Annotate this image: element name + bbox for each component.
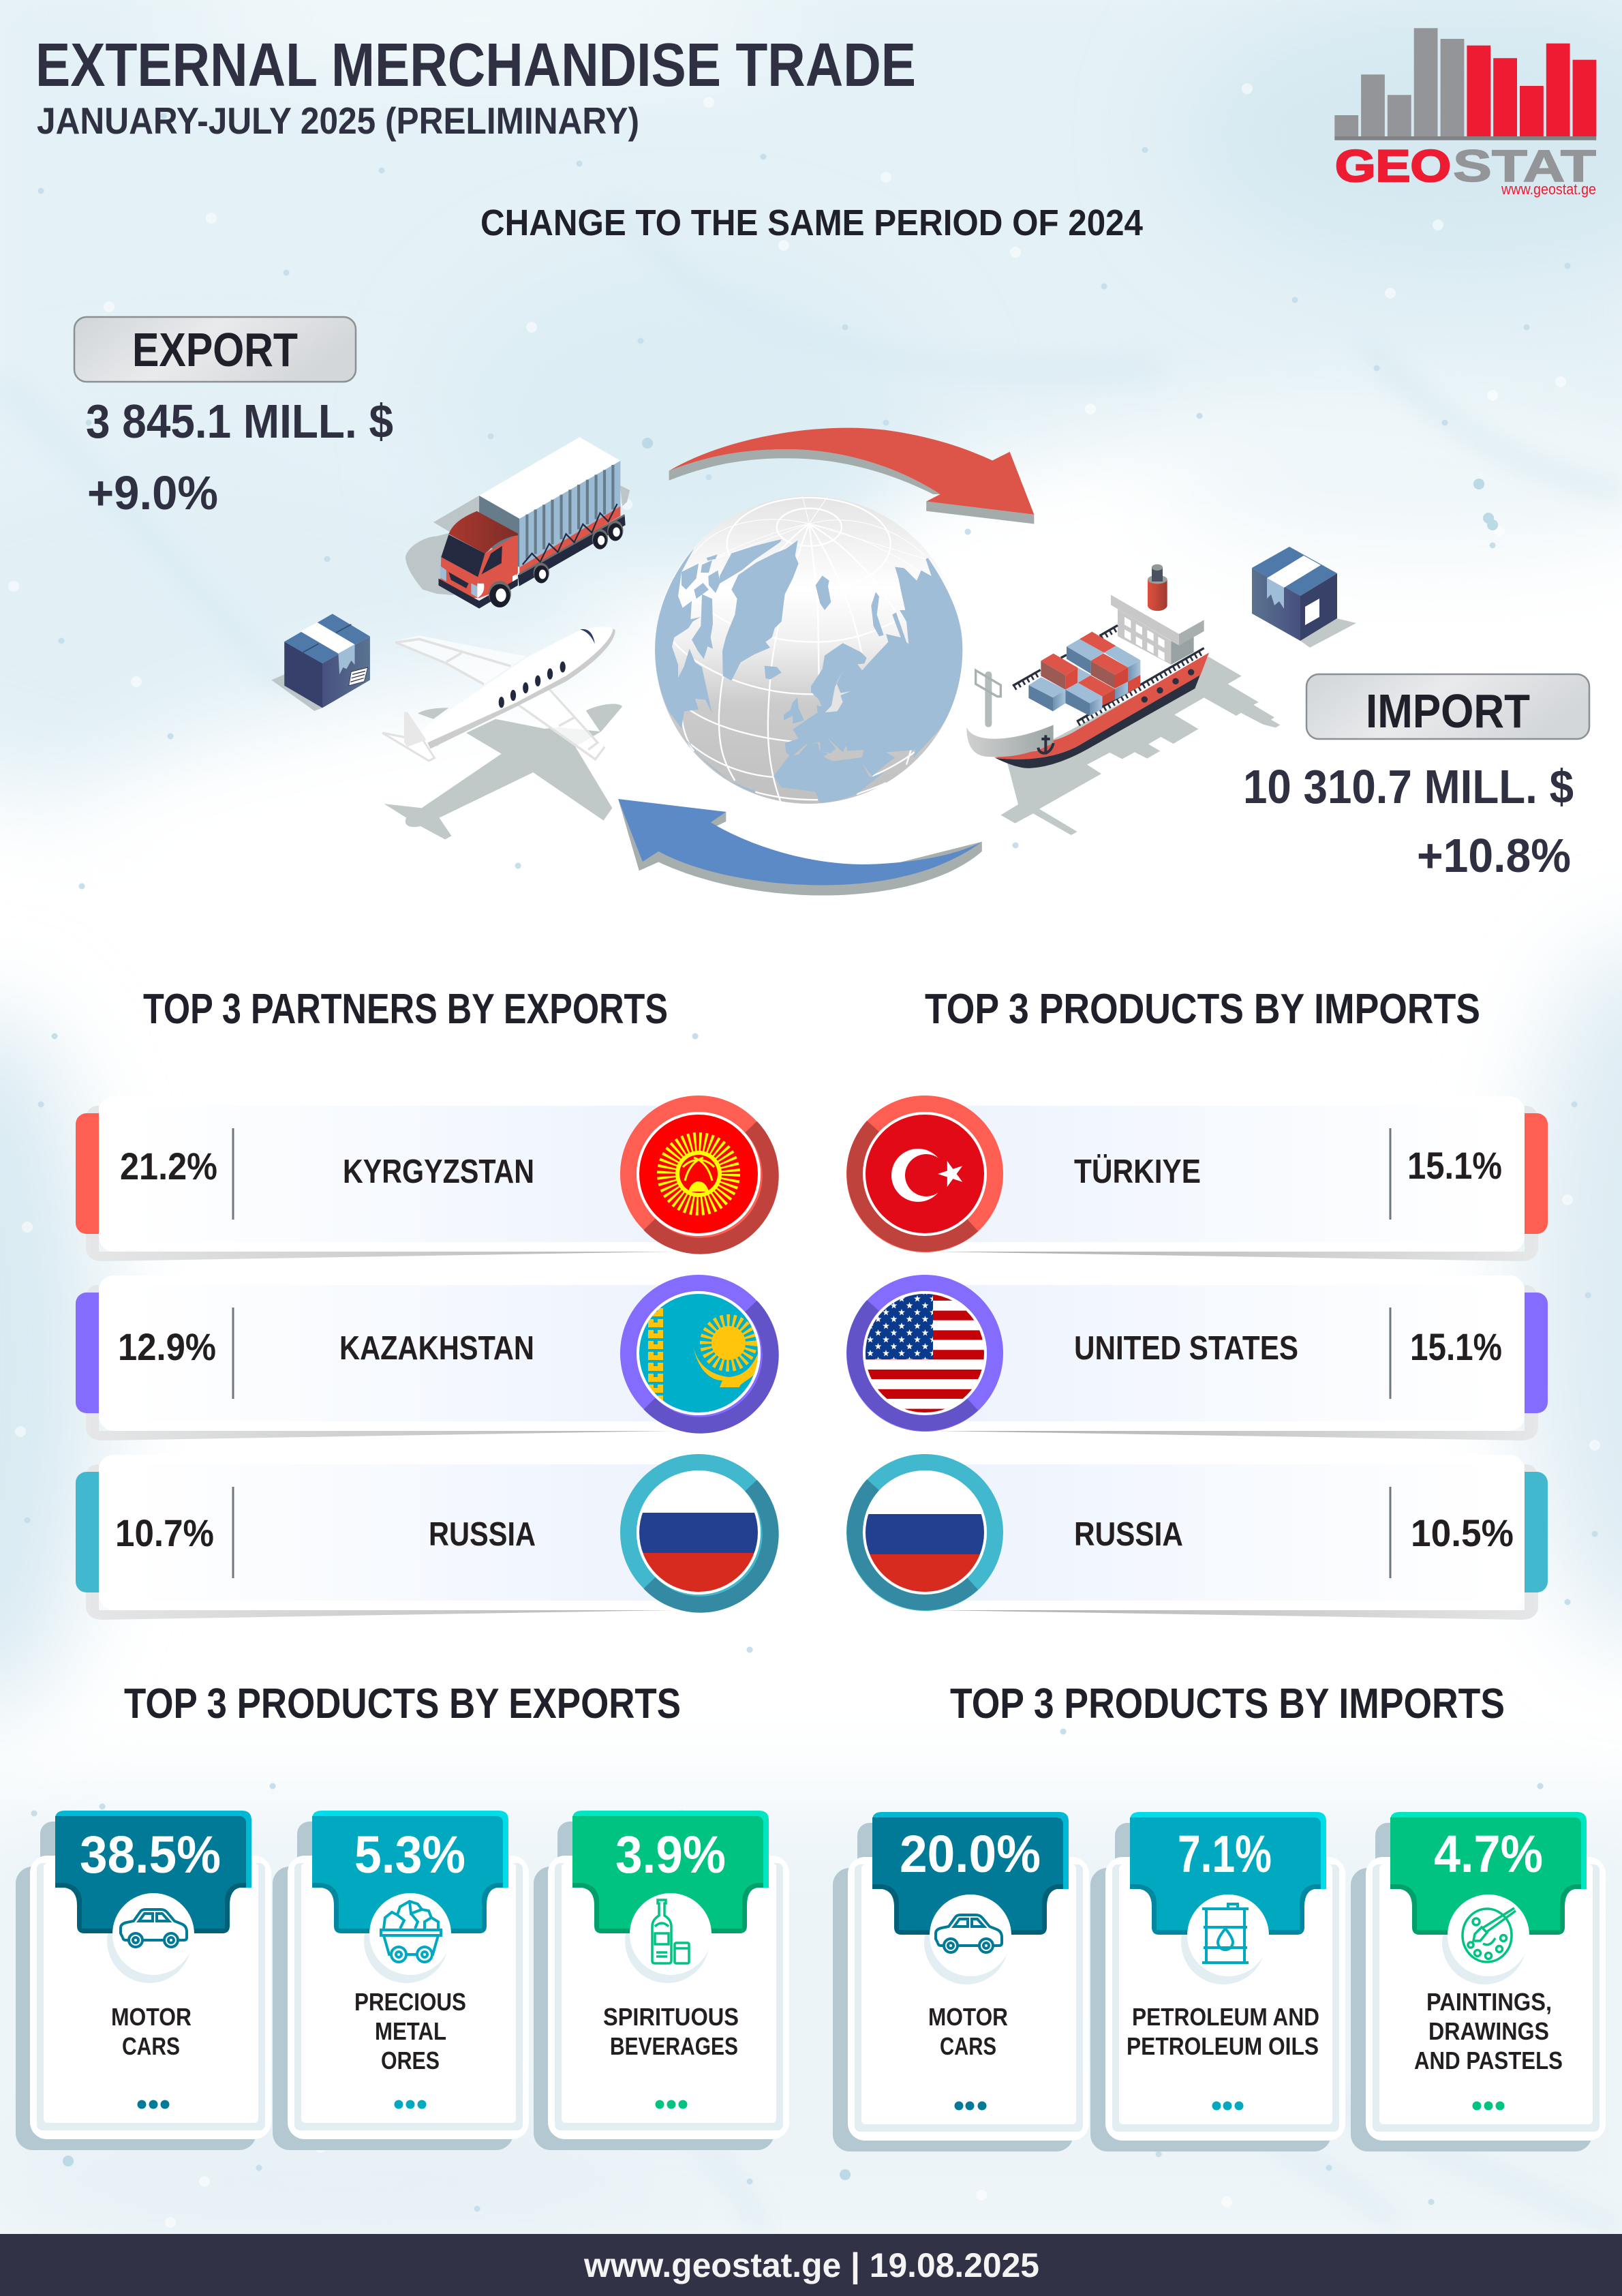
import block: [1243, 674, 1589, 882]
card: motor cars export: CARS: [122, 2032, 180, 2060]
card: petroleum: 7.1%: [1178, 1825, 1272, 1884]
card: motor cars import: MOTOR: [928, 2003, 1008, 2031]
heading: top 3 products by exports: TOP 3 PRODUCTS BY EXPORTS: [124, 1680, 681, 1727]
heading: top 3 products by imports: TOP 3 PRODUCTS BY IMPORTS: [925, 986, 1480, 1033]
export block: EXPORT: [132, 323, 298, 376]
icon: truck: [406, 437, 630, 609]
flag: United States: [855, 1283, 995, 1423]
export block: 3 845.1 MILL. $: [86, 395, 393, 448]
card: paintings drawings pastels: 4.7%: [1434, 1825, 1543, 1884]
icon: box left: [271, 614, 370, 711]
flag: Russia: [628, 1462, 771, 1605]
row: Kyrgyzstan: [76, 1096, 771, 1261]
card: motor cars import: [833, 1812, 1089, 2151]
card: petroleum: PETROLEUM OILS: [1127, 2032, 1319, 2060]
icon: oil barrel: [1202, 1904, 1249, 1963]
export block: [74, 317, 393, 519]
title: EXTERNAL MERCHANDISE TRADE: [35, 31, 916, 100]
flag: Russia: [855, 1462, 995, 1603]
icon: bottle and glass: [652, 1900, 689, 1963]
row: Russia (imports): [855, 1455, 1548, 1620]
card: precious metal ores: [273, 1811, 529, 2150]
row: United States: [855, 1275, 1548, 1440]
card: petroleum: PETROLEUM AND: [1132, 2003, 1319, 2031]
row: United States: UNITED STATES: [1074, 1330, 1298, 1367]
card: paintings drawings pastels: AND PASTELS: [1414, 2046, 1563, 2074]
logo: GEOSTAT: [1334, 28, 1596, 198]
card: precious metal ores: 5.3%: [354, 1826, 465, 1884]
import block: IMPORT: [1366, 684, 1530, 738]
heading: top 3 partners by exports: TOP 3 PARTNERS BY EXPORTS: [143, 986, 668, 1033]
icon: palette: [1463, 1908, 1516, 1962]
logo: GEOSTAT: www.geostat.ge: [1501, 181, 1596, 198]
footer bar: www.geostat.ge | 19.08.2025: [583, 2246, 1039, 2285]
import block: +10.8%: [1417, 829, 1571, 882]
row: Kyrgyzstan: KYRGYZSTAN: [343, 1153, 534, 1190]
icon: mine cart: [381, 1901, 441, 1962]
card: paintings drawings pastels: [1351, 1812, 1606, 2151]
arrow: red export arrow: [669, 428, 1034, 524]
logo: GEOSTAT: STAT: [1453, 140, 1596, 191]
card: motor cars export: [16, 1811, 271, 2150]
row: Russia (imports): 10.5%: [1411, 1511, 1514, 1554]
card: motor cars import: CARS: [940, 2032, 996, 2060]
row: Türkiye: 15.1%: [1407, 1144, 1502, 1187]
import block: 10 310.7 MILL. $: [1243, 760, 1574, 813]
hero illustration: [271, 428, 1356, 896]
card: precious metal ores: ORES: [381, 2046, 440, 2074]
heading: change to the same period: CHANGE TO THE SAME PERIOD OF 2024: [480, 202, 1143, 243]
icon: airplane: [382, 626, 622, 839]
row: Kazakhstan: [76, 1275, 771, 1440]
card: paintings drawings pastels: DRAWINGS: [1428, 2017, 1549, 2045]
icon: globe: [655, 494, 963, 804]
logo: GEOSTAT: GEO: [1335, 140, 1451, 191]
row: Kyrgyzstan: 21.2%: [120, 1145, 217, 1188]
icon: car: [121, 1909, 187, 1947]
footer bar: [0, 2234, 1622, 2296]
card: spirituous beverages: SPIRITUOUS: [603, 2003, 739, 2031]
card: precious metal ores: METAL: [375, 2017, 446, 2045]
card: petroleum: [1090, 1812, 1345, 2151]
row: Kazakhstan: 12.9%: [118, 1325, 216, 1368]
icon: cargo ship: [966, 564, 1280, 835]
icon: box right: [1252, 547, 1356, 648]
heading: top 3 products by imports: TOP 3 PRODUCTS BY IMPORTS: [950, 1680, 1505, 1727]
row: Türkiye: [855, 1096, 1548, 1261]
card: precious metal ores: PRECIOUS: [354, 1988, 466, 2016]
row: Russia (exports): [76, 1455, 771, 1620]
card: paintings drawings pastels: PAINTINGS,: [1426, 1988, 1552, 2016]
card: motor cars export: MOTOR: [111, 2003, 192, 2031]
flag: Kyrgyzstan: [628, 1104, 771, 1246]
export block: +9.0%: [87, 466, 218, 519]
card: motor cars import: 20.0%: [900, 1825, 1041, 1884]
row: Russia (exports): 10.7%: [115, 1511, 214, 1554]
flag: Türkiye: [855, 1104, 995, 1244]
row: Russia (imports): RUSSIA: [1074, 1516, 1183, 1553]
flag: Kazakhstan: [628, 1283, 771, 1425]
arrow: blue import arrow: [618, 799, 982, 896]
icon: car: [936, 1915, 1002, 1952]
card: spirituous beverages: [534, 1811, 789, 2150]
row: United States: 15.1%: [1410, 1325, 1502, 1368]
card: spirituous beverages: BEVERAGES: [610, 2032, 738, 2060]
row: Türkiye: TÜRKIYE: [1074, 1153, 1201, 1190]
card: spirituous beverages: 3.9%: [615, 1826, 726, 1884]
row: Russia (exports): RUSSIA: [429, 1516, 536, 1553]
card: motor cars export: 38.5%: [80, 1826, 221, 1884]
row: Kazakhstan: KAZAKHSTAN: [339, 1330, 534, 1367]
subtitle: JANUARY-JULY 2025 (PRELIMINARY): [37, 100, 639, 142]
